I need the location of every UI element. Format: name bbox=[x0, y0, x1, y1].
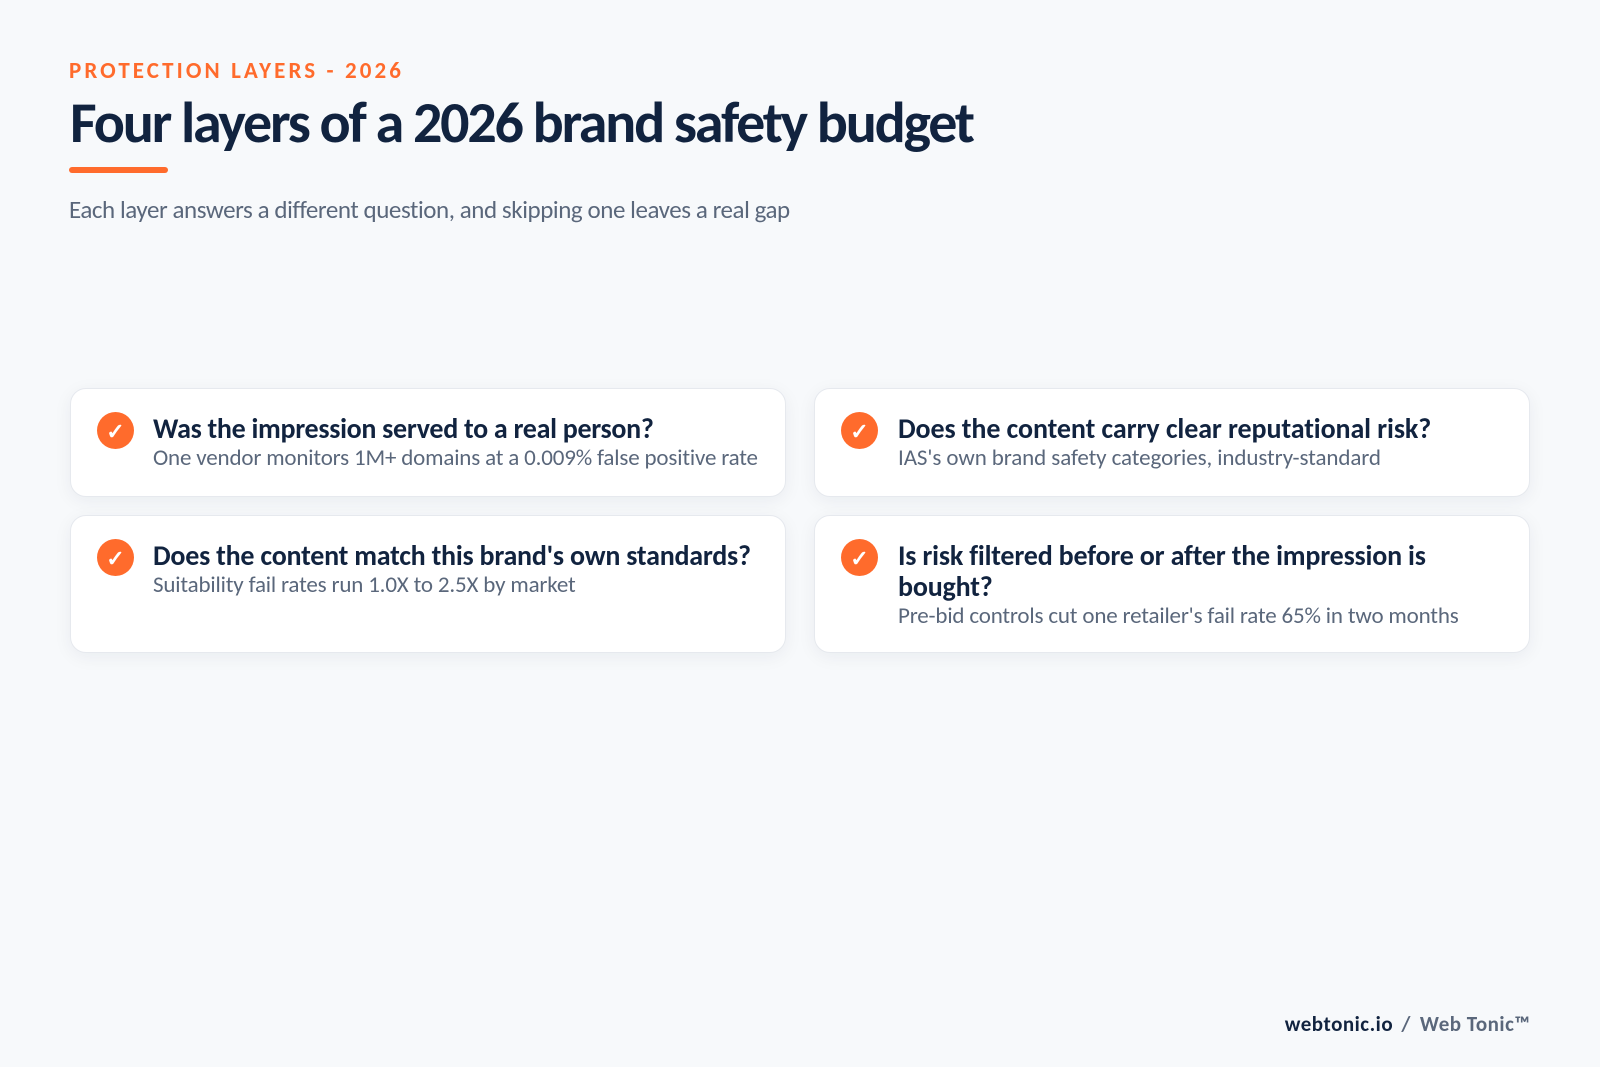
text: reputational risk bbox=[898, 411, 1431, 472]
panel: reputational risk bbox=[814, 388, 1530, 497]
panel: real person bbox=[70, 388, 786, 497]
title underline bbox=[69, 167, 168, 173]
text: real person bbox=[153, 411, 758, 472]
footer credit: webtonic.io / Web Tonic™ bbox=[1285, 1011, 1530, 1037]
icon: check: ✓ bbox=[850, 545, 869, 572]
text: pre-bid filtering: Is risk filtered before or after the impression is bought? bbox=[898, 538, 1426, 604]
text: brand standards bbox=[153, 538, 751, 599]
text: real person: One vendor monitors 1M+ domains at a 0.009% false positive rate bbox=[153, 444, 758, 472]
title: Four layers of a 2026 brand safety budget bbox=[70, 87, 973, 158]
icon: check bbox=[841, 412, 878, 449]
text: brand standards: Does the content match this brand's own standards? bbox=[153, 538, 751, 573]
text: pre-bid filtering: Pre-bid controls cut one retailer's fail rate 65% in two months bbox=[898, 602, 1459, 630]
icon: check bbox=[841, 539, 878, 576]
text: pre-bid filtering bbox=[898, 538, 1459, 630]
text: brand standards: Suitability fail rates run 1.0X to 2.5X by market bbox=[153, 571, 576, 599]
icon: check: ✓ bbox=[850, 418, 869, 445]
panel: pre-bid filtering bbox=[814, 515, 1530, 653]
eyebrow: PROTECTION LAYERS - 2026 bbox=[69, 57, 404, 85]
panel: brand standards bbox=[70, 515, 786, 653]
subtitle: Each layer answers a different question, and skipping one leaves a real gap bbox=[69, 194, 790, 225]
icon: check: ✓ bbox=[106, 545, 125, 572]
text: real person: Was the impression served to a real person? bbox=[153, 411, 654, 446]
icon: check bbox=[97, 412, 134, 449]
icon: check bbox=[97, 539, 134, 576]
text: reputational risk: Does the content carry clear reputational risk? bbox=[898, 411, 1431, 446]
icon: check: ✓ bbox=[106, 418, 125, 445]
text: reputational risk: IAS's own brand safety categories, industry-standard bbox=[898, 444, 1381, 472]
